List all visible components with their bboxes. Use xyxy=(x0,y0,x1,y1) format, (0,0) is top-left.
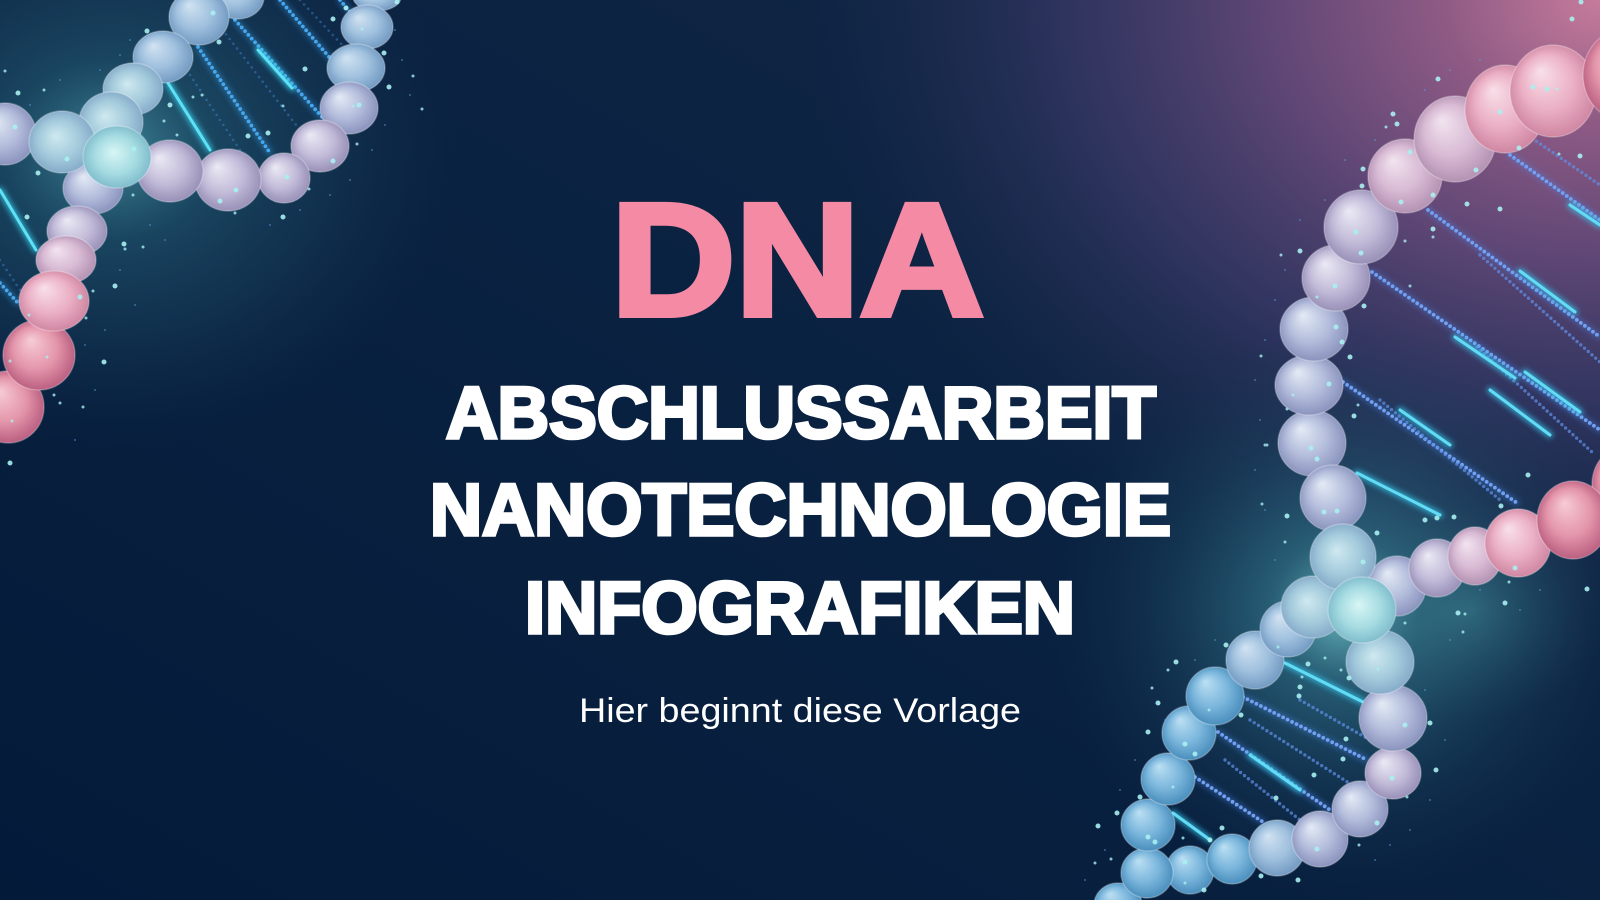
right helix strand A: lower blue beads xyxy=(1094,449,1600,900)
subtitle: Hier beginnt diese Vorlage xyxy=(579,692,1021,730)
left helix strand: beads xyxy=(0,0,401,443)
right helix strand B: pink to lavender beads xyxy=(1249,29,1600,876)
right helix rungs xyxy=(1173,130,1600,840)
heading lines: INFOGRAFIKEN xyxy=(525,568,1075,649)
heading lines xyxy=(430,373,1171,649)
heading lines: NANOTECHNOLOGIE xyxy=(430,470,1171,551)
title: DNA: DNA xyxy=(611,170,984,349)
left helix rungs xyxy=(0,0,350,303)
heading lines: ABSCHLUSSARBEIT xyxy=(446,373,1156,454)
